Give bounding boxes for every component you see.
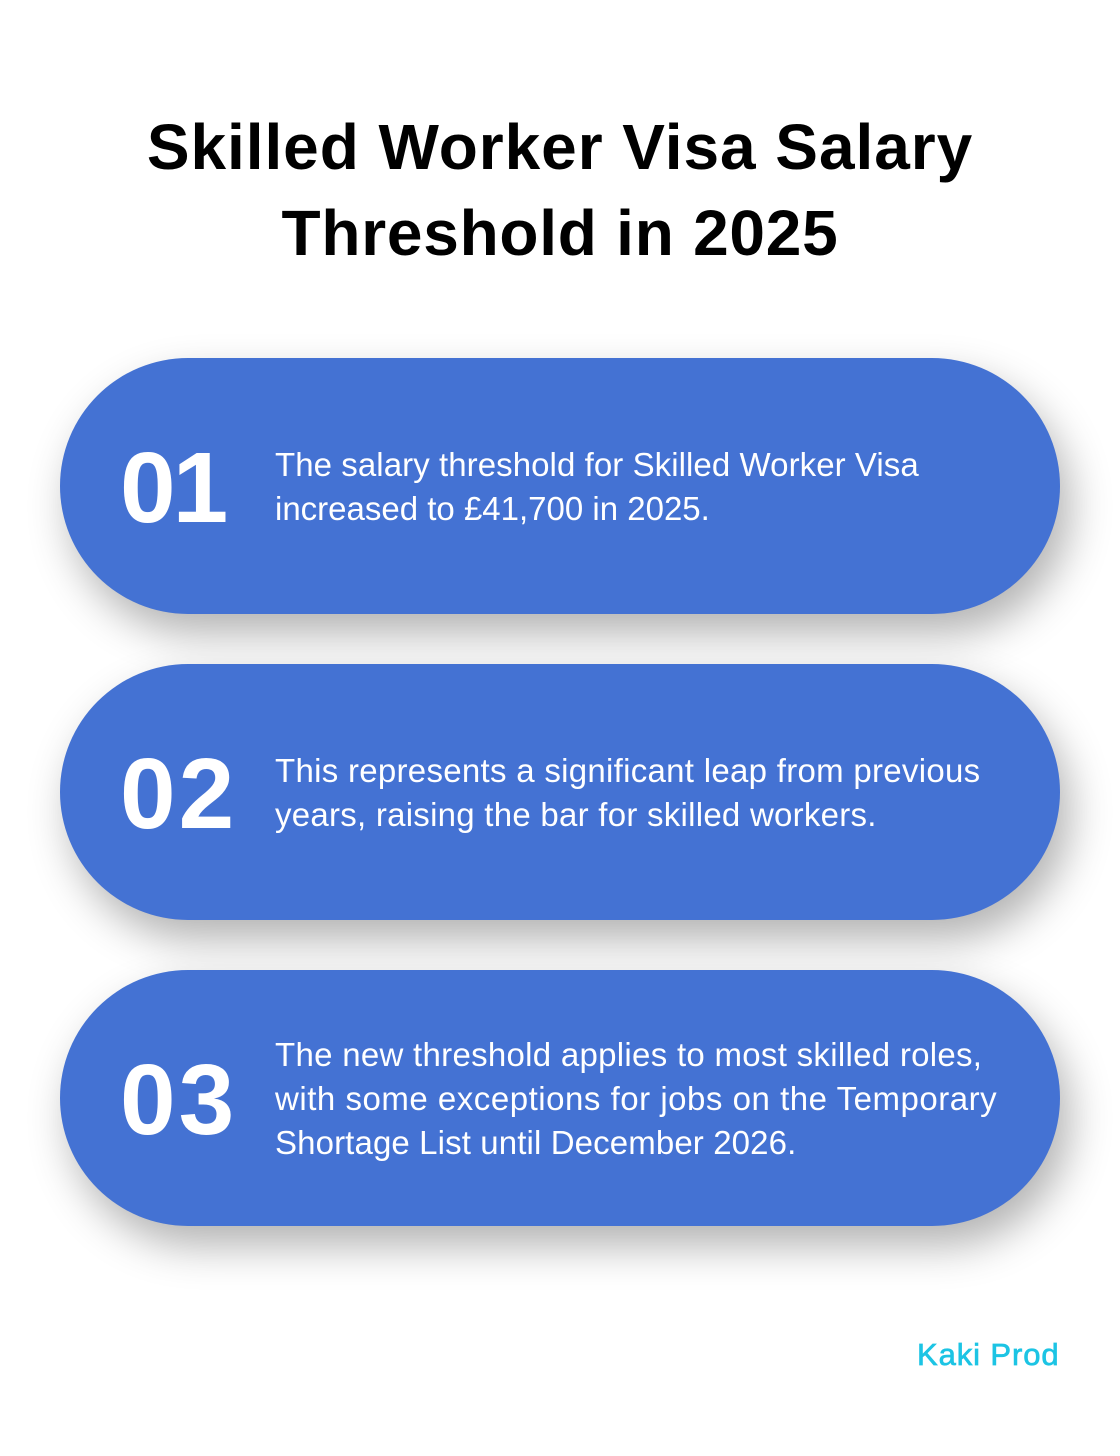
text: step 03: Shortage List until December 2026.: [275, 1124, 796, 1161]
title: Skilled Worker Visa Salary: [147, 111, 973, 183]
step number 03: 03: [120, 1044, 237, 1156]
title: Threshold in 2025: [282, 197, 838, 269]
title: [147, 111, 973, 269]
text: step 02: This represents a significant leap from previous: [275, 752, 980, 789]
text: step 03: [275, 1036, 997, 1161]
text: step 03: The new threshold applies to most skilled roles,: [275, 1036, 982, 1073]
panel: step 01: [60, 358, 1060, 614]
panel: step 02: [60, 664, 1060, 920]
step number 01: 01: [120, 432, 225, 544]
text: step 02: years, raising the bar for skilled workers.: [275, 796, 877, 833]
logo: Kaki Prod: Kaki Prod: [917, 1337, 1060, 1372]
step number 02: 02: [120, 738, 237, 850]
text: step 01: increased to £41,700 in 2025.: [275, 490, 710, 527]
text: step 03: with some exceptions for jobs on the Temporary: [275, 1080, 997, 1117]
panel: step 03: [60, 970, 1060, 1226]
text: step 02: [275, 752, 980, 833]
text: step 01: The salary threshold for Skilled Worker Visa: [275, 446, 919, 483]
text: step 01: [275, 446, 919, 527]
